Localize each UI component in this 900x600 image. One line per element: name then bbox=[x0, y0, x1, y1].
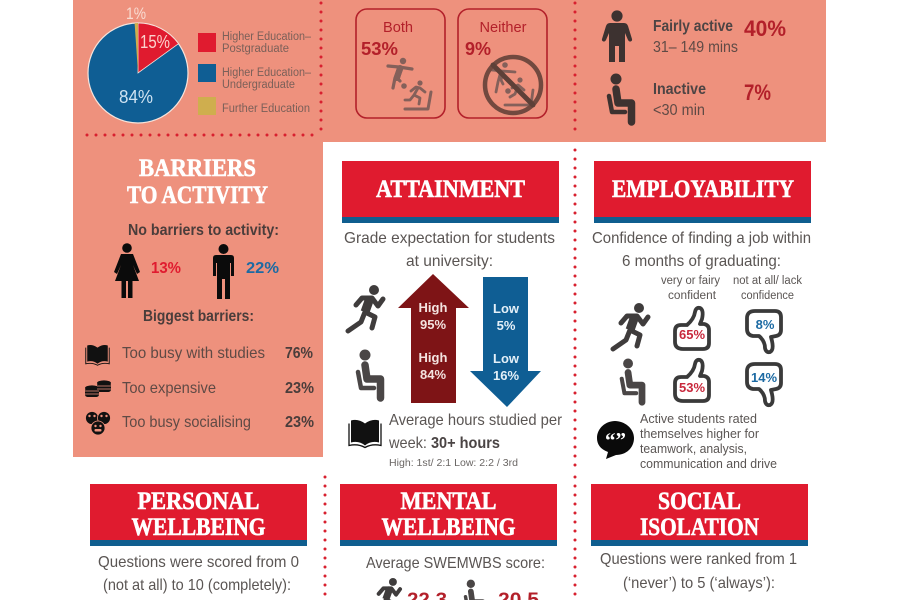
icon: thumb up 65%: 65% bbox=[679, 327, 705, 342]
text: fairly active: 31– 149 mins bbox=[653, 39, 738, 56]
pie chart: study level: 15% bbox=[140, 32, 170, 52]
heading: personal wellbeing bbox=[90, 484, 307, 546]
row: too busy with studies bbox=[86, 345, 313, 365]
text: fairly active: Fairly active bbox=[653, 18, 733, 35]
text: grade expectation: Grade expectation for students bbox=[344, 230, 555, 247]
row: too busy socialising: 23% bbox=[285, 414, 314, 431]
icon: no sport bbox=[485, 57, 541, 113]
text: inactive: Inactive bbox=[653, 81, 706, 98]
heading: barriers to activity: BARRIERS bbox=[139, 155, 256, 182]
icon: sitter bbox=[622, 359, 642, 402]
text: personal scoring: (not at all) to 10 (completely): bbox=[103, 577, 291, 594]
text: confidence: Confidence of finding a job within bbox=[592, 230, 811, 247]
text: active students: teamwork, analysis, bbox=[640, 441, 747, 456]
icon: thumb down 14% bbox=[747, 364, 781, 405]
icon: standing figure bbox=[602, 10, 632, 62]
column labels: confidence: very or fairy bbox=[661, 275, 720, 287]
stat: men no barriers: 22% bbox=[246, 260, 279, 277]
heading: barriers to activity: TO ACTIVITY bbox=[127, 182, 268, 209]
row: too expensive: 23% bbox=[285, 380, 314, 397]
icon: speech bubble: “” bbox=[605, 428, 626, 452]
text: active students: themselves higher for bbox=[640, 426, 760, 441]
text: hours studied: High: 1st/ 2:1 Low: 2:2 / 3rd bbox=[389, 457, 518, 469]
icon: thumb down 14%: 14% bbox=[751, 370, 777, 385]
icon: thumb up 53%: 53% bbox=[679, 380, 705, 395]
legend: study level: Further Education bbox=[222, 103, 310, 115]
arrow: up high grades: 84% bbox=[420, 367, 446, 382]
row: too busy socialising: Too busy socialising bbox=[122, 414, 251, 431]
text: confidence bbox=[592, 230, 811, 270]
heading: mental wellbeing: WELLBEING bbox=[382, 514, 516, 541]
text: swemwbs: Average SWEMWBS score: bbox=[366, 555, 545, 572]
pie chart: study level bbox=[88, 5, 188, 123]
text: social ranking: (‘never’) to 5 (‘always’): bbox=[623, 575, 775, 592]
arrow: down low grades: 16% bbox=[493, 368, 519, 383]
text: fairly active: 40% bbox=[744, 16, 786, 41]
arrow: up high grades: High bbox=[419, 300, 447, 315]
text: personal scoring bbox=[98, 554, 299, 594]
icon: runner bbox=[372, 578, 400, 600]
subheading: biggest barriers: Biggest barriers: bbox=[143, 308, 254, 325]
panel: top salmon band bbox=[73, 0, 826, 142]
heading: attainment bbox=[342, 161, 559, 223]
panel: neither: Neither bbox=[480, 19, 526, 36]
icon: open book bbox=[349, 420, 381, 448]
text: grade expectation: at university: bbox=[406, 253, 493, 270]
icon: man bbox=[213, 244, 234, 299]
heading: employability bbox=[594, 161, 811, 223]
panel: neither bbox=[458, 9, 547, 118]
row: too expensive bbox=[85, 380, 314, 397]
row: too busy socialising bbox=[86, 412, 314, 435]
arrow: up high grades: High bbox=[419, 350, 447, 365]
heading: mental wellbeing: MENTAL bbox=[400, 488, 496, 515]
stat: women no barriers: 13% bbox=[151, 260, 181, 277]
icon: woman bbox=[114, 243, 140, 298]
icon: sitter bbox=[358, 350, 380, 398]
icon: seated figure bbox=[609, 74, 632, 122]
icon: thumb down 8%: 8% bbox=[756, 317, 775, 332]
icon: runner bbox=[348, 285, 383, 331]
panel: both: 53% bbox=[361, 39, 398, 59]
heading: personal wellbeing: PERSONAL bbox=[138, 488, 260, 515]
heading: attainment: ATTAINMENT bbox=[376, 176, 525, 203]
text: confidence: 6 months of graduating: bbox=[622, 253, 781, 270]
row: too busy with studies: 76% bbox=[285, 345, 313, 362]
arrow: up high grades bbox=[398, 274, 469, 403]
panel: barriers to activity background bbox=[73, 142, 323, 457]
legend: study level: Undergraduate bbox=[222, 79, 295, 91]
text: hours studied: week: 30+ hours bbox=[388, 435, 500, 452]
text: hours studied: Average hours studied per bbox=[389, 412, 563, 429]
row: too busy with studies: Too busy with studies bbox=[122, 345, 265, 362]
arrow: down low grades: Low bbox=[493, 301, 520, 316]
icon: thumb down 8% bbox=[747, 311, 781, 352]
heading: social isolation: ISOLATION bbox=[640, 514, 759, 541]
icon: thumb up 53% bbox=[675, 360, 709, 401]
text: active students bbox=[640, 411, 777, 471]
icon: runner bbox=[613, 303, 648, 349]
text: inactive: 7% bbox=[744, 80, 771, 105]
text: inactive bbox=[653, 80, 771, 119]
pie chart: study level: 84% bbox=[119, 86, 153, 107]
legend: study level bbox=[198, 31, 312, 115]
text: personal scoring: Questions were scored from 0 bbox=[98, 554, 299, 571]
text: fairly active bbox=[653, 16, 786, 56]
heading: social isolation bbox=[591, 484, 808, 546]
panel: both bbox=[356, 9, 445, 118]
text: social ranking: Questions were ranked from 1 bbox=[600, 551, 797, 568]
legend: study level: Higher Education– bbox=[222, 67, 312, 79]
heading: employability: EMPLOYABILITY bbox=[612, 176, 794, 203]
text: active students: Active students rated bbox=[640, 411, 757, 426]
icon: footballer bbox=[388, 58, 412, 89]
icon: sitter bbox=[466, 580, 483, 600]
text: social ranking bbox=[600, 551, 797, 592]
column labels: confidence bbox=[661, 275, 802, 302]
subheading: no barriers: No barriers to activity: bbox=[128, 222, 279, 239]
text: hours studied bbox=[388, 412, 563, 469]
text: active students: communication and drive bbox=[640, 456, 777, 471]
column labels: confidence: confidence bbox=[741, 290, 794, 302]
arrow: down low grades: 5% bbox=[497, 318, 516, 333]
heading: barriers to activity bbox=[127, 155, 268, 209]
legend: study level: Postgraduate bbox=[222, 43, 289, 55]
pie chart: study level: 1% bbox=[126, 5, 146, 23]
column labels: confidence: not at all/ lack bbox=[733, 275, 802, 287]
panel: neither: 9% bbox=[465, 39, 491, 59]
column labels: confidence: confident bbox=[668, 290, 717, 302]
panel: both: Both bbox=[383, 19, 413, 36]
heading: social isolation: SOCIAL bbox=[658, 488, 741, 515]
text: inactive: <30 min bbox=[653, 102, 705, 119]
icon: treadmill runner bbox=[405, 80, 431, 109]
arrow: up high grades: 95% bbox=[420, 317, 446, 332]
legend: study level: Higher Education– bbox=[222, 31, 312, 43]
arrow: down low grades: Low bbox=[493, 351, 520, 366]
icon: thumb up 65% bbox=[675, 308, 709, 349]
heading: mental wellbeing bbox=[340, 484, 557, 546]
icon: speech bubble bbox=[597, 421, 634, 459]
text: grade expectation bbox=[344, 230, 555, 270]
arrow: down low grades bbox=[470, 277, 541, 407]
row: too expensive: Too expensive bbox=[122, 380, 216, 397]
heading: personal wellbeing: WELLBEING bbox=[132, 514, 266, 541]
